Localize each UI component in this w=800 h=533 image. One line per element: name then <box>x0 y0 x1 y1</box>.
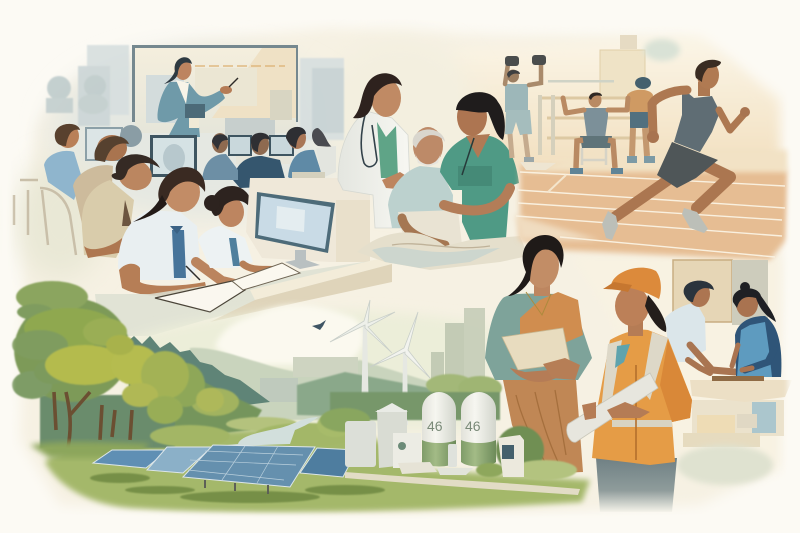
panel: fitness <box>505 35 790 260</box>
woman in saree <box>485 235 592 474</box>
patient <box>388 127 462 247</box>
wind turbines <box>330 300 430 425</box>
dumbbell athlete <box>505 55 546 162</box>
tank label: 46 <box>427 418 443 434</box>
hydrogen tanks <box>422 392 496 466</box>
girl student back <box>198 186 278 270</box>
standing athlete <box>627 77 655 163</box>
bushes <box>476 426 577 480</box>
teacher <box>158 57 238 137</box>
dirt path <box>345 472 580 495</box>
classroom screen <box>132 45 298 144</box>
storage units <box>345 403 421 468</box>
side chairs <box>14 180 76 255</box>
small equipment <box>398 444 473 475</box>
desk and book <box>95 178 392 336</box>
running track <box>515 150 790 260</box>
artisan woman <box>732 282 781 377</box>
craftsman <box>665 281 735 373</box>
city skyline behind classroom <box>46 45 344 140</box>
grass meadow <box>45 425 590 512</box>
panel: classroom <box>14 45 392 336</box>
forest band <box>40 336 270 448</box>
bench athlete <box>563 92 628 174</box>
panel: nature and renewable energy <box>12 281 590 512</box>
desk monitor <box>255 192 335 269</box>
gym frame <box>540 35 680 155</box>
back row students <box>44 124 336 200</box>
plane <box>312 320 326 330</box>
kiosk <box>498 435 524 477</box>
table <box>690 376 792 402</box>
engineer <box>567 268 692 512</box>
forest bushes <box>150 363 355 447</box>
girl student front <box>118 167 243 296</box>
trees behind tanks <box>320 374 502 432</box>
tree left <box>12 281 224 458</box>
city towers <box>431 308 485 383</box>
hazy forest <box>297 372 490 420</box>
tank label: 46 <box>465 418 481 434</box>
river <box>205 417 318 447</box>
panel: healthcare <box>338 73 528 270</box>
student in beige shirt <box>82 154 160 258</box>
left seated student <box>73 135 129 232</box>
panel: workers <box>345 235 792 512</box>
nurse <box>440 92 519 240</box>
runner <box>602 60 750 240</box>
blanket and bed <box>357 232 528 270</box>
sky and clouds <box>130 305 490 430</box>
solar panels <box>93 445 357 494</box>
back row computers <box>85 127 294 177</box>
doctor <box>338 73 413 228</box>
workshop background <box>673 260 784 485</box>
